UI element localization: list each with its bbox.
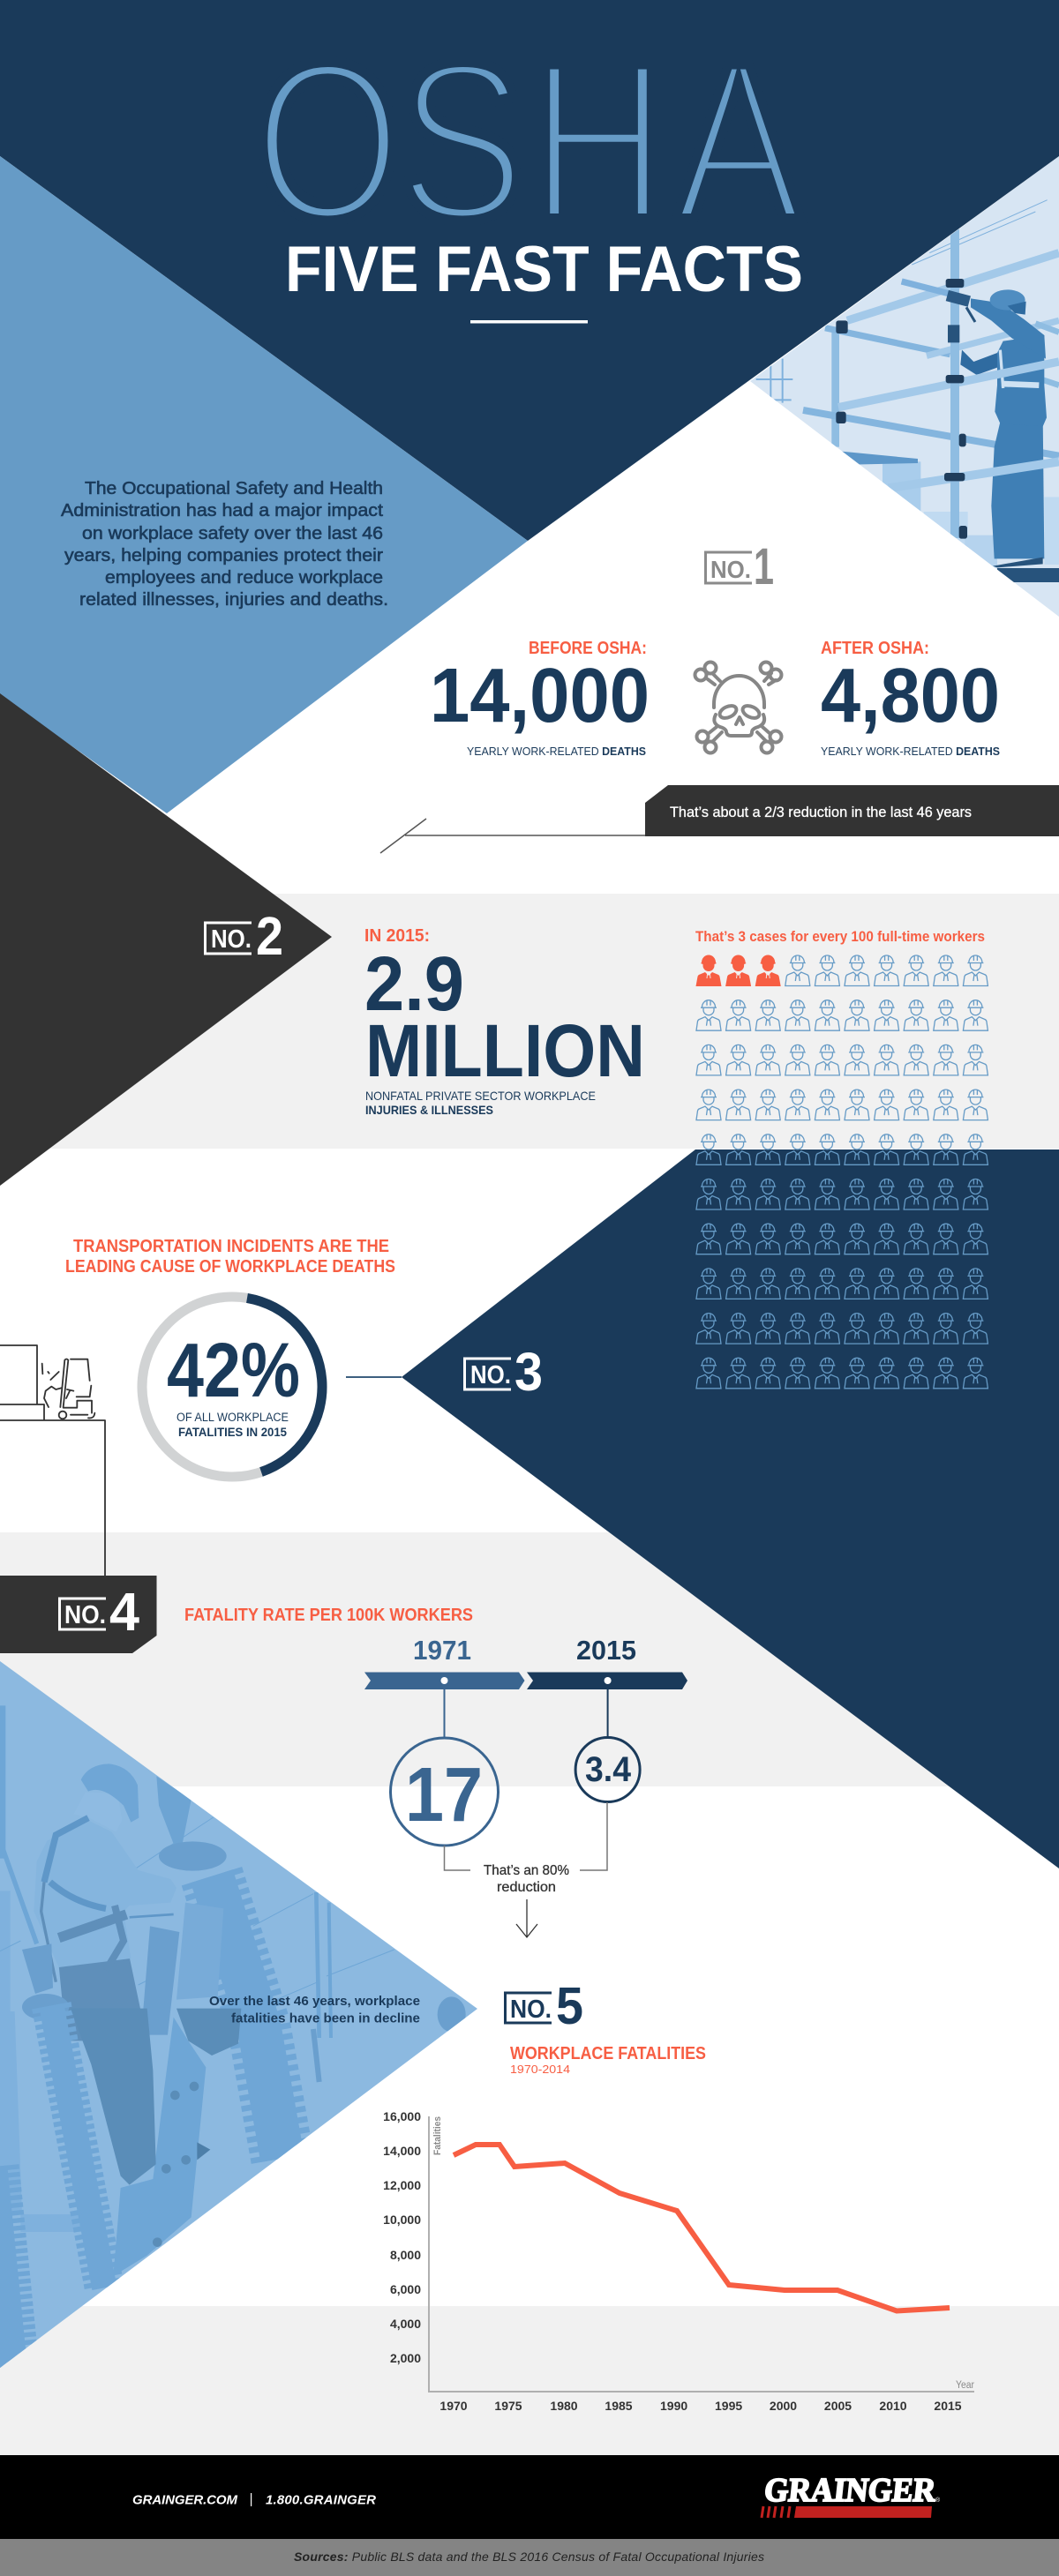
callout connector lines <box>380 819 645 853</box>
worker figure <box>960 289 1059 582</box>
background: gray band section 5 <box>0 2306 1059 2455</box>
text: 80 percent reduction <box>484 1863 569 1895</box>
label: in 2015: IN 2015: <box>364 926 430 946</box>
footer: contact text: 1.800.GRAINGER <box>266 2493 376 2507</box>
text: decline note: fatalities have been in decline <box>231 2011 420 2026</box>
lower left hardware <box>22 1943 53 1994</box>
brackets <box>176 1903 223 2000</box>
connector: ring to number 3 <box>346 1376 402 1378</box>
ribbed insulator column <box>212 1876 282 2159</box>
heading: transportation incidents: TRANSPORTATION INCIDENTS ARE THE <box>73 1237 389 1256</box>
badge: number 1: 1 <box>754 538 774 595</box>
icon: forklift hitting boxes <box>0 1345 105 1576</box>
badge: number 5 <box>505 1977 583 2035</box>
chart: line chart of fatalities: 8,000 <box>390 2248 421 2262</box>
number: 4,800: 4,800 <box>821 653 1000 738</box>
text: decline note: Over the last 46 years, workplace <box>209 1994 420 2009</box>
upper insulator <box>156 1776 227 1871</box>
number: million: MILLION <box>365 1009 645 1092</box>
stat circle: 3.4 <box>575 1738 640 1801</box>
caption: yearly deaths after: YEARLY WORK-RELATED DEATHS <box>821 745 1000 758</box>
chart: line chart of fatalities: 6,000 <box>390 2282 421 2296</box>
chart: line chart of fatalities: 12,000 <box>383 2178 421 2192</box>
footer: contact text <box>132 2493 376 2507</box>
chart: line chart of fatalities: Fatalities <box>432 2116 443 2155</box>
icon: skull and crossbones <box>695 662 782 753</box>
text: 80 percent reduction: That’s an 80% <box>484 1863 569 1878</box>
chart: line chart of fatalities <box>383 2109 974 2413</box>
caption: of all fatalities: FATALITIES IN 2015 <box>178 1426 287 1439</box>
badge: number 5: NO. <box>510 1996 552 2024</box>
chart: line chart of fatalities: 2015 <box>934 2399 962 2413</box>
chart: 42 percent ring <box>142 1297 322 1477</box>
chart: line chart of fatalities: 1970 <box>439 2399 468 2413</box>
chart: line chart of fatalities: 2000 <box>770 2399 797 2413</box>
caption: nonfatal injuries <box>365 1089 596 1117</box>
subheading: year range: 1970-2014 <box>510 2063 570 2076</box>
callout: two thirds reduction <box>645 785 1059 836</box>
caption: yearly deaths before: YEARLY WORK-RELATED DEATHS <box>467 745 646 758</box>
caption: nonfatal injuries: NONFATAL PRIVATE SECTOR WORKPLACE <box>365 1089 596 1103</box>
stat circle: 17 <box>390 1738 498 1846</box>
heading: fatality rate: FATALITY RATE PER 100K WORKERS <box>184 1606 473 1625</box>
number: 2.9: 2.9 <box>364 941 464 1027</box>
text block: intro paragraph: employees and reduce workplace <box>105 568 383 588</box>
panel: dark triangle number 2 <box>0 693 332 1186</box>
text block: intro paragraph: on workplace safety over the last 46 <box>82 524 383 543</box>
lower structure <box>0 2011 90 2232</box>
number: 42 percent: 42% <box>167 1328 300 1413</box>
badge: number 5: 5 <box>556 1977 583 2035</box>
panel: top navy header shape <box>0 0 1059 541</box>
badge: number 1: NO. <box>710 556 751 583</box>
poles and wires <box>0 1705 394 2038</box>
badge: number 2: NO. <box>211 925 252 954</box>
badge: number 2: 2 <box>256 906 283 966</box>
text block: intro paragraph <box>61 479 388 610</box>
badge: number 3: 3 <box>514 1342 543 1402</box>
highlighted workers <box>695 955 781 986</box>
icon array: 100 workers, 3 highlighted <box>695 955 988 1389</box>
chart: line chart of fatalities: 1980 <box>550 2399 578 2413</box>
caption: of all fatalities: OF ALL WORKPLACE <box>176 1411 289 1424</box>
text block: intro paragraph: related illnesses, injuries and deaths. <box>79 590 388 610</box>
label: after OSHA: AFTER OSHA: <box>821 639 929 658</box>
panel: navy triangle number 3 <box>402 1149 1059 1868</box>
timeline: 1971 and 2015: 1971 <box>413 1635 471 1666</box>
footer: sources band <box>0 2539 1059 2576</box>
text block: intro paragraph: years, helping companies protect their <box>64 546 383 565</box>
text: decline note <box>209 1994 420 2026</box>
chart: line chart of fatalities: 1985 <box>605 2399 633 2413</box>
panel: lineman photo <box>0 1659 481 2373</box>
chart: line chart of fatalities: 2010 <box>879 2399 907 2413</box>
title: OSHA: OSHA <box>254 15 801 266</box>
ribbed insulator columns <box>0 2005 104 2373</box>
chart: line chart of fatalities: 2005 <box>824 2399 852 2413</box>
text block: intro paragraph: The Occupational Safety and Health <box>85 479 383 498</box>
text: sources: Sources: Public BLS data and the BLS 2016 Census of Fatal Occupational Injuries <box>294 2550 764 2564</box>
chart: line chart of fatalities: 4,000 <box>390 2317 421 2331</box>
background: gray band section 4 <box>0 1532 1059 1786</box>
chart: line chart of fatalities: Year <box>956 2380 974 2391</box>
title rule <box>470 320 588 323</box>
heading: workplace fatalities: WORKPLACE FATALITIES <box>510 2044 706 2063</box>
timeline: 1971 and 2015 <box>364 1635 687 1738</box>
timeline: 1971 and 2015: 2015 <box>576 1635 636 1666</box>
stat circle: 3.4: 3.4 <box>585 1750 632 1789</box>
arrow: down to number 5 <box>516 1899 537 1937</box>
connectors to reduction note <box>445 1802 607 1870</box>
text block: intro paragraph: Administration has had a major impact <box>61 501 383 520</box>
lineman figure <box>34 1764 176 2041</box>
panel: light blue intro triangle <box>0 156 528 813</box>
caption: nonfatal injuries: INJURIES & ILLNESSES <box>365 1103 493 1117</box>
chart: line chart of fatalities: 1990 <box>660 2399 687 2413</box>
footer: black bar <box>0 2455 1059 2539</box>
chart: line chart of fatalities: 16,000 <box>383 2109 421 2123</box>
chart: line chart of fatalities: 1975 <box>494 2399 522 2413</box>
text: 80 percent reduction: reduction <box>497 1880 556 1895</box>
heading: transportation incidents: LEADING CAUSE OF WORKPLACE DEATHS <box>65 1257 395 1277</box>
badge: number 4: 4 <box>109 1582 139 1642</box>
heading: transportation incidents <box>65 1237 395 1277</box>
footer: contact text: GRAINGER.COM <box>132 2493 238 2507</box>
number: 14,000: 14,000 <box>430 653 650 738</box>
stat circle: 17: 17 <box>405 1752 483 1838</box>
badge: number 4 <box>0 1576 157 1653</box>
badge: number 2 <box>205 906 283 966</box>
chart: line chart of fatalities: 10,000 <box>383 2213 421 2227</box>
chart: line chart of fatalities: 14,000 <box>383 2144 421 2158</box>
badge: number 3 <box>464 1342 543 1402</box>
background: gray band section 2 <box>0 894 1059 1149</box>
logo: Grainger: ® <box>935 2497 941 2504</box>
background buildings <box>841 452 1059 567</box>
callout: two thirds reduction: That’s about a 2/3 reduction in the last 46 years <box>670 804 972 820</box>
heading: five fast facts: FIVE FAST FACTS <box>285 234 803 305</box>
badge: number 3: NO. <box>470 1361 511 1389</box>
label: before OSHA: BEFORE OSHA: <box>529 639 647 658</box>
text: 3 cases per 100 workers: That’s 3 cases for every 100 full-time workers <box>695 929 985 945</box>
badge: number 4: NO. <box>64 1601 106 1629</box>
badge: number 1 <box>706 538 774 595</box>
caption: of all fatalities <box>176 1411 289 1439</box>
legs <box>71 2009 156 2185</box>
chart: line chart of fatalities: 2,000 <box>390 2351 421 2365</box>
logo: Grainger: GRAINGER <box>762 2472 938 2509</box>
chart: line chart of fatalities: 1995 <box>715 2399 742 2413</box>
panel: scaffold worker photo <box>741 150 1059 626</box>
